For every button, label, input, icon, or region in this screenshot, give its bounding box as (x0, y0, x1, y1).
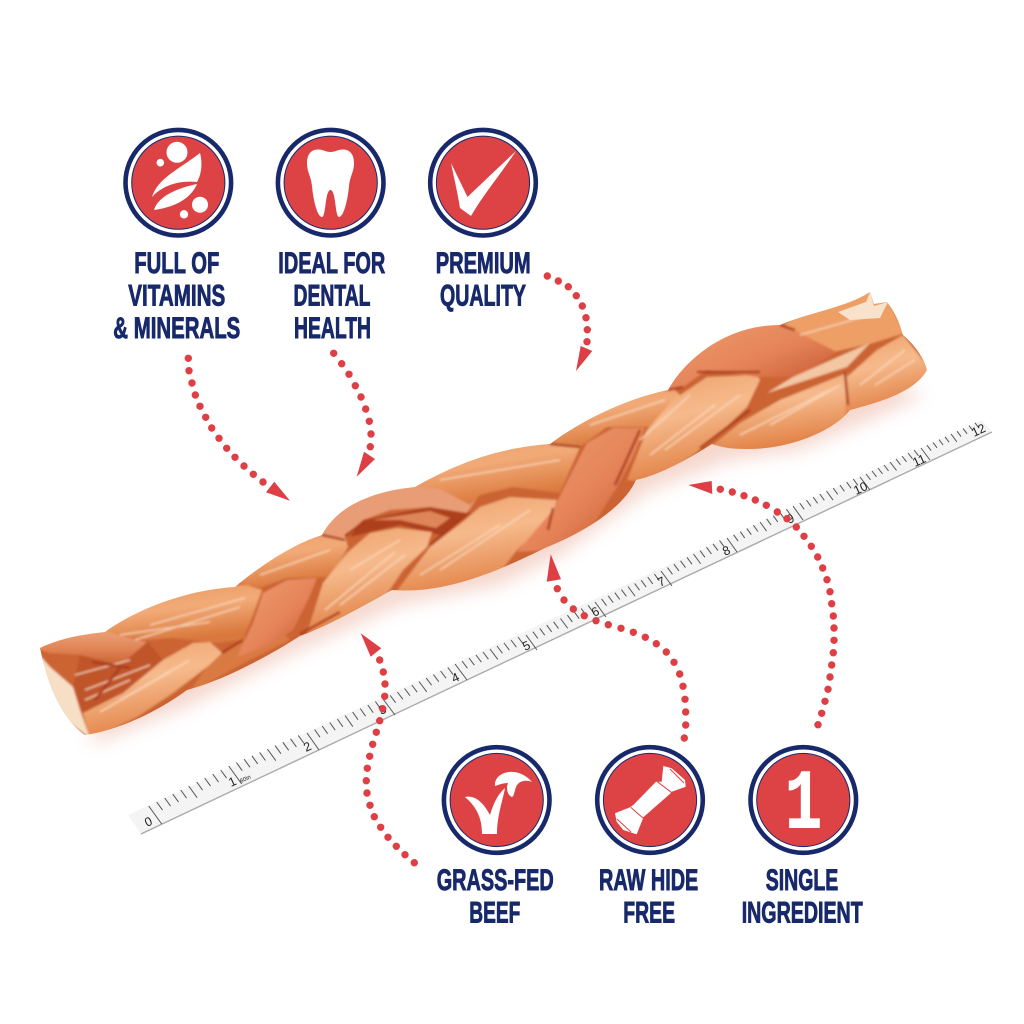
top-right loose fibre (838, 292, 888, 320)
ruler: 6 (589, 604, 602, 620)
shadow under braid (90, 380, 925, 745)
label: full of vitamins and minerals: VITAMINS (128, 280, 225, 313)
icon: tooth (307, 150, 354, 217)
label: raw hide free (599, 864, 698, 930)
ruler: 5 (520, 638, 533, 654)
label: full of vitamins and minerals (113, 247, 240, 345)
badge: single ingredient (750, 747, 856, 853)
label: raw hide free: RAW HIDE (599, 864, 698, 897)
arrow: vitamins (188, 358, 290, 501)
dark creases (92, 325, 848, 700)
braided bully stick photo (20, 280, 940, 750)
ruler (128, 420, 992, 834)
ruler: 3 (376, 702, 389, 718)
label: premium quality (436, 247, 531, 313)
label: single ingredient: SINGLE (766, 864, 838, 897)
label: ideal for dental health (278, 247, 386, 345)
ruler: 11 (910, 452, 928, 470)
ruler: 4 (449, 670, 462, 686)
arrow: premium quality (547, 276, 592, 371)
label: ideal for dental health: DENTAL (294, 280, 370, 313)
badge: vitamins and minerals (126, 130, 231, 236)
ruler: 0 (142, 814, 155, 830)
icon: grass blade (465, 772, 532, 834)
fibre highlights (75, 312, 915, 712)
icon: number one: 1 (785, 758, 822, 853)
ruler: 1 (226, 774, 239, 790)
arrow: dental (334, 353, 375, 477)
badge: dental health (278, 130, 384, 236)
label: ideal for dental health: IDEAL FOR (278, 247, 386, 280)
label: raw hide free: FREE (623, 897, 675, 930)
ruler: 12 (969, 421, 988, 440)
ruler: 8 (720, 543, 733, 559)
ruler: 9 (784, 511, 797, 527)
label: single ingredient (742, 864, 863, 930)
label: grass-fed beef: GRASS-FED (437, 864, 554, 897)
label: grass-fed beef (437, 864, 554, 930)
icon: bone (615, 766, 686, 834)
icon: leaf with bubbles (152, 142, 208, 218)
label: single ingredient: INGREDIENT (742, 897, 863, 930)
icon: check mark (451, 151, 516, 216)
label: premium quality: PREMIUM (436, 247, 531, 280)
arrow: raw hide free (547, 554, 686, 738)
ruler: 60in (239, 775, 252, 785)
ruler: 10 (851, 479, 870, 498)
ruler: 7 (655, 574, 668, 590)
label: full of vitamins and minerals: & MINERALS (113, 312, 240, 345)
label: grass-fed beef: BEEF (469, 897, 520, 930)
arrow: single ingredient (688, 481, 834, 725)
ruler: 2 (301, 739, 314, 755)
label: premium quality: QUALITY (440, 280, 526, 313)
badge: premium quality (430, 130, 536, 236)
label: full of vitamins and minerals: FULL OF (134, 247, 219, 280)
arrow: grass-fed (361, 633, 414, 863)
label: ideal for dental health: HEALTH (294, 312, 371, 345)
badge: raw hide free (597, 747, 703, 853)
braid strands (20, 280, 940, 750)
badge: grass-fed beef (444, 747, 550, 853)
